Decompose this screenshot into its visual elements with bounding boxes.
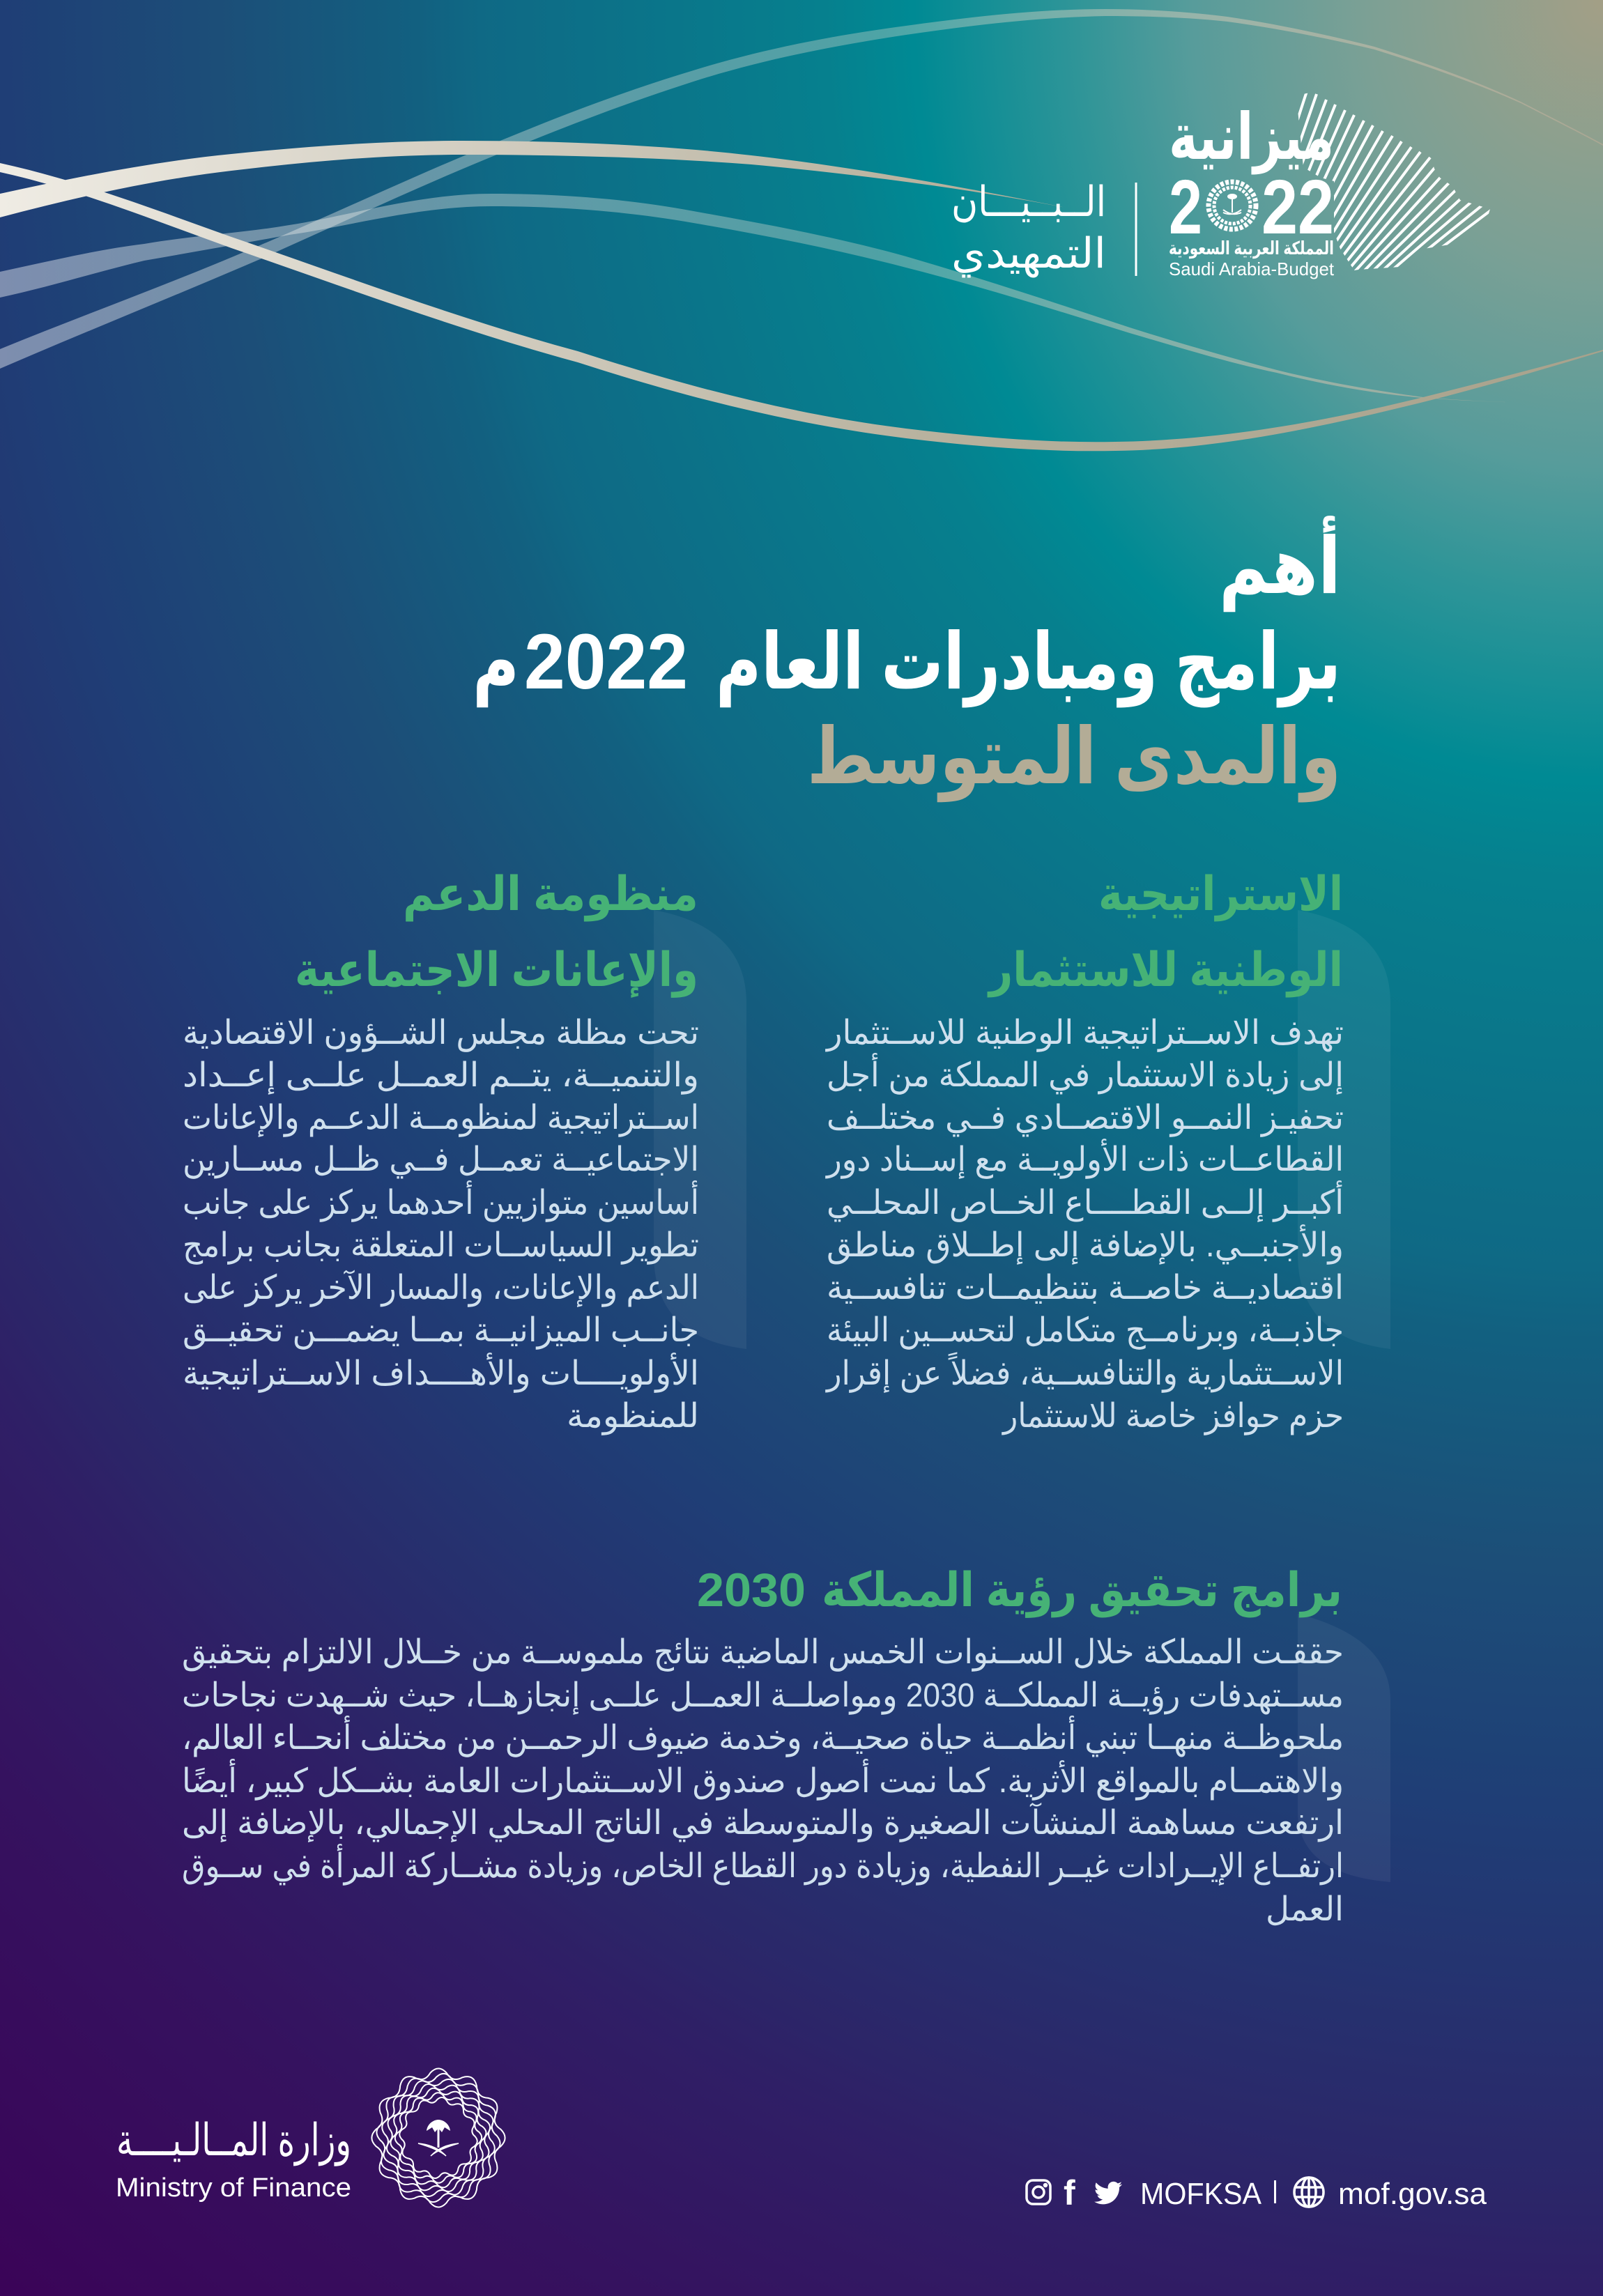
text block: vision 2030 realization programs: والاهتمــام بالمواقع الأثرية. كما نمت أصول صندوق الاســتثمارات العامة بشــكل كبير، أيضًا	[182, 1759, 1344, 1801]
text block: national investment strategy: تحفيـز النمــو الاقتصــادي فــي مختلــف	[827, 1100, 1344, 1137]
icon: palm and swords	[418, 2120, 459, 2156]
icon: instagram	[1027, 2180, 1050, 2204]
icon: wave rosette	[365, 2060, 512, 2215]
text block: vision 2030 realization programs: العمل	[1266, 1891, 1344, 1928]
text block: national investment strategy: حزم حوافز خاصة للاستثمار	[1002, 1398, 1344, 1435]
text block: support and social subsidies system: أساسين متوازيين أحدهما يركز على جانب	[183, 1180, 699, 1222]
text block: national investment strategy: أكبــر إلــى القطــــاع الخــاص المحلــي	[827, 1180, 1344, 1222]
logo year digits: 2	[1169, 164, 1202, 250]
website: mof.gov.sa	[1338, 2177, 1487, 2211]
icon: striped map of Saudi Arabia	[1298, 93, 1490, 270]
text block: support and social subsidies system: جانــب الميزانيــة بمــا يضمـــن تحقيــق	[183, 1312, 699, 1350]
icon: globe	[1294, 2178, 1324, 2207]
footer: social and website	[1027, 2173, 1487, 2212]
text block: support and social subsidies system: تطوير السياســات المتعلقة بجانب برامج	[183, 1227, 699, 1265]
heading: vision 2030 realization programs: برامج تحقيق رؤية المملكة	[822, 1564, 1342, 1618]
text block: vision 2030 realization programs: ارتفعت مساهمة المنشآت الصغيرة والمتوسطة في الناتج المحلي الإجمالي، بالإضافة إلى	[182, 1802, 1344, 1842]
logo captions: Saudi Arabia-Budget	[1169, 259, 1335, 279]
text block: support and social subsidies system	[183, 1015, 699, 1435]
budget 2022 logo	[1169, 93, 1490, 279]
panel: support and social subsidies system	[183, 868, 699, 1435]
header: preliminary statement label	[951, 178, 1137, 278]
heading: national investment strategy: الاستراتيجية	[1098, 868, 1343, 922]
text block: national investment strategy	[825, 1015, 1344, 1435]
icon: emblem in place of zero	[1209, 182, 1256, 229]
title	[473, 516, 1341, 803]
ghost shapes behind columns	[654, 910, 1390, 1882]
text block: support and social subsidies system: الأولويــــات والأهــــداف الاســتراتيجية	[183, 1352, 699, 1393]
text block: national investment strategy: جاذبــة، وبرنامــج متكامل لتحســين البيئة	[827, 1312, 1344, 1350]
text block: vision 2030 realization programs: حققـت المملكة خلال الســنوات الخمس الماضية نتائج ملموســة من خــلال الالتزام بتحقيق	[182, 1634, 1344, 1672]
text block: support and social subsidies system: والتنميــة، يتــم العمــل علــى إعــداد	[183, 1057, 699, 1095]
icon: twitter	[1094, 2182, 1122, 2204]
text block: vision 2030 realization programs: ملحوظــة منهــا تبني أنظمــة حياة صحيــة، وخدمة ضيوف الرحمــن من مختلف أنحــاء العالم،	[182, 1716, 1344, 1757]
logo year digits: 22	[1261, 164, 1334, 250]
ministry name	[116, 2115, 351, 2203]
social handle: MOFKSA	[1140, 2177, 1262, 2211]
text block: national investment strategy: اقتصاديــة خاصــة بتنظيمــات تنافســية	[827, 1270, 1344, 1307]
text block: national investment strategy: والأجنبــي. بالإضافة إلى إطــلاق مناطق	[827, 1224, 1344, 1265]
ministry name: Ministry of Finance	[116, 2173, 351, 2203]
title: 2022	[524, 618, 688, 705]
heading: support and social subsidies system: منظومة الدعم	[403, 868, 698, 922]
text block: vision 2030 realization programs	[182, 1634, 1344, 1928]
logo year digits	[1169, 164, 1334, 250]
ministry of finance logo	[116, 2060, 512, 2215]
text block: vision 2030 realization programs: مســتهدفات رؤيــة المملكــة 2030 ومواصلــة العمــل علــى إنجازهــا، حيث شــهدت نجاحات	[182, 1677, 1344, 1715]
text block: support and social subsidies system: للمنظومة	[567, 1398, 699, 1435]
heading: vision 2030 realization programs: 2030	[697, 1564, 806, 1617]
text block: national investment strategy: القطاعــات ذات الأولويــة مع إســناد دور	[825, 1138, 1344, 1179]
text block: national investment strategy: إلى زيادة الاستثمار في المملكة من أجل	[827, 1053, 1344, 1095]
text block: national investment strategy: تهدف الاســتراتيجية الوطنية للاســتثمار	[825, 1015, 1344, 1052]
text block: vision 2030 realization programs: ارتفــاع الإيــرادات غيــر النفطية، وزيادة دور القطاع الخاص، وزيادة مشــاركة المرأة في ســوق	[182, 1844, 1344, 1886]
text block: support and social subsidies system: الدعم والإعانات، والمسار الآخر يركز على	[183, 1269, 699, 1307]
icon: facebook: f	[1064, 2173, 1075, 2212]
heading: national investment strategy	[987, 868, 1343, 998]
logo wordmark: ميزانية	[1169, 102, 1334, 175]
text block: national investment strategy: الاســتثمارية والتنافســية، فضلاً عن إقرار	[825, 1352, 1344, 1393]
logo captions: المملكة العربية السعودية	[1169, 238, 1334, 259]
header: preliminary statement label: التمهيدي	[951, 230, 1106, 278]
panel: vision 2030 realization programs	[182, 1564, 1344, 1928]
text block: support and social subsidies system: الاجتماعيــة تعمــل فــي ظــل مســارين	[183, 1141, 699, 1179]
decorative ribbons	[0, 9, 1603, 451]
text block: support and social subsidies system: اســتراتيجية لمنظومــة الدعــم والإعانات	[183, 1100, 699, 1137]
title: برامج ومبادرات العام	[716, 618, 1341, 708]
title: والمدى المتوسط	[807, 713, 1341, 803]
title: م	[473, 618, 519, 708]
text block: support and social subsidies system: تحت مظلة مجلس الشــؤون الاقتصادية	[183, 1015, 699, 1052]
heading: national investment strategy: الوطنية للاستثمار	[987, 943, 1343, 998]
heading: support and social subsidies system: والإعانات الاجتماعية	[295, 943, 698, 998]
ministry name: وزارة المــالـيــــة	[116, 2115, 351, 2166]
logo captions	[1169, 238, 1335, 279]
panel: national investment strategy	[825, 868, 1344, 1435]
heading: support and social subsidies system	[295, 868, 698, 998]
header: preliminary statement label: الــبــيـــان	[951, 178, 1106, 225]
title: أهم	[1219, 516, 1341, 612]
